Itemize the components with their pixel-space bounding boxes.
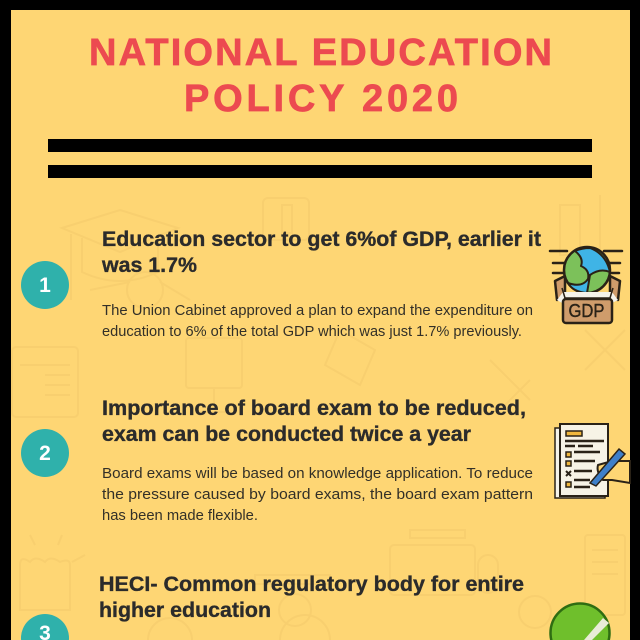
item 2 body text: [102, 466, 533, 524]
icon: exam paper and pen: [555, 424, 630, 498]
item 3 number badge: [21, 614, 69, 640]
item 3 heading: HECI- Common regulatory body for entire: [99, 573, 524, 596]
item 1 number badge: [21, 261, 69, 309]
item 1 number badge: 1: [39, 274, 51, 297]
item 2 body text: the pressure caused by board exams, the board exam pattern: [102, 487, 533, 503]
item 2 heading: exam can be conducted twice a year: [102, 423, 471, 446]
item 1 heading: Education sector to get 6%of GDP, earlier it: [102, 228, 541, 251]
title: NATIONAL EDUCATION: [89, 32, 552, 74]
item 2 body text: Board exams will be based on knowledge application. To reduce: [102, 466, 533, 482]
title: POLICY 2020: [184, 78, 458, 120]
item 1 heading: was 1.7%: [101, 254, 197, 277]
faint background education icons: [12, 195, 625, 640]
item 1 body text: [102, 303, 533, 340]
item 1 heading: [101, 228, 541, 277]
item 2 number badge: 2: [39, 442, 51, 465]
item 1 body text: education to 6% of the total GDP which was just 1.7% previously.: [102, 324, 522, 340]
title: [89, 32, 552, 120]
item 1 body text: The Union Cabinet approved a plan to expand the expenditure on: [102, 303, 533, 319]
item 2 number badge: [21, 429, 69, 477]
icon: GDP globe in box: GDP: [568, 301, 604, 321]
item 2 body text: has been made flexible.: [102, 508, 258, 524]
item 3 heading: [99, 573, 524, 622]
item 3 heading: higher education: [99, 599, 271, 622]
icon: GDP globe in box: [550, 247, 622, 323]
title divider bars: [48, 139, 592, 178]
item 2 heading: [102, 397, 526, 446]
item 2 heading: Importance of board exam to be reduced,: [102, 397, 526, 420]
icon: green circle with white pencil: [550, 604, 610, 640]
